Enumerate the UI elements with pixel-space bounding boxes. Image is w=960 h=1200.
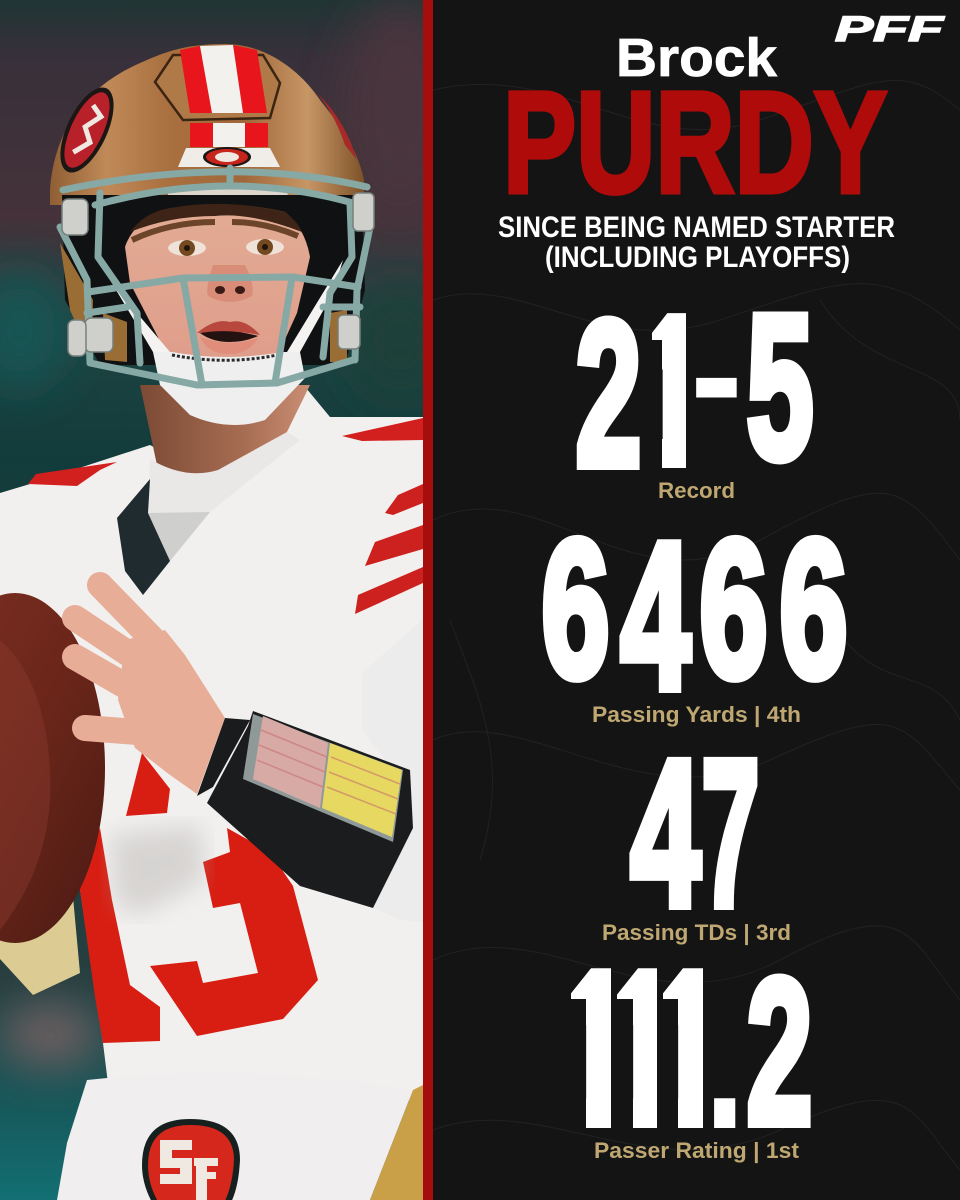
- jersey body: [0, 388, 423, 1100]
- stat: passing yards: 6: [700, 500, 768, 718]
- brow pad: [168, 190, 288, 195]
- pants: [57, 1073, 413, 1200]
- stat: passer rating: Passer Rating | 1st: [594, 1138, 800, 1163]
- flag patch: [243, 714, 403, 842]
- subtitle: [498, 211, 895, 274]
- stat: record: 2: [576, 278, 642, 509]
- stat: passing touchdowns: 4: [630, 718, 700, 950]
- face: [125, 204, 310, 357]
- helmet front bumper: [178, 148, 280, 167]
- forearm sleeve: [362, 619, 423, 922]
- eyes: [168, 239, 284, 256]
- gold pants: [370, 1085, 423, 1200]
- contour lines: [433, 80, 960, 1170]
- panel: player photo: [0, 0, 460, 1200]
- neck: [140, 385, 310, 480]
- sleeve stripes: [355, 484, 423, 614]
- stat: passing touchdowns: 7: [702, 718, 760, 950]
- subtitle: SINCE BEING NAMED STARTER: [498, 211, 895, 244]
- jersey shadow: [110, 825, 205, 915]
- stat: passing yards: 4: [620, 500, 690, 733]
- stat: passing touchdowns: Passing TDs | 3rd: [602, 920, 791, 945]
- helmet stripes: [180, 45, 268, 147]
- collar undershirt: [148, 432, 300, 513]
- stat: record: [576, 272, 814, 518]
- stat: passing touchdowns: [602, 718, 791, 950]
- helmet front logo: [203, 147, 251, 167]
- helmet vent: [155, 55, 280, 120]
- stat: record: 1: [643, 277, 703, 518]
- nose: [207, 265, 253, 302]
- cheek straps: [100, 260, 343, 352]
- arm sleeve: [207, 711, 413, 908]
- stat: passer rating: 1: [565, 932, 629, 1180]
- stat: passing yards: [542, 500, 848, 733]
- logo: PFF: PFF: [835, 10, 946, 49]
- lower left arm: [0, 901, 80, 995]
- stat: passer rating: .: [709, 986, 740, 1158]
- helmet side logo: [60, 88, 114, 172]
- stat: passing yards: 6: [542, 500, 610, 718]
- stat: passer rating: 1: [657, 932, 721, 1180]
- stat: passer rating: 2: [746, 936, 812, 1167]
- team logo on pants: [142, 1119, 240, 1200]
- hand: [75, 585, 225, 794]
- shoulder patches: [28, 462, 117, 486]
- red divider: [423, 0, 433, 1200]
- stat: passer rating: [565, 932, 812, 1180]
- eyebrows: [132, 222, 298, 240]
- helmet right logo: [317, 93, 357, 160]
- stat: record: -: [692, 297, 741, 454]
- title: Brock: Brock: [616, 28, 778, 88]
- chin strap: [172, 354, 282, 360]
- chin cup: [153, 352, 305, 425]
- football: [0, 593, 105, 943]
- hair shadow: [130, 204, 302, 232]
- stat: record: Record: [658, 478, 735, 503]
- stat: record: 5: [746, 272, 814, 502]
- stat: passing yards: Passing Yards | 4th: [592, 702, 801, 727]
- helmet opening: [62, 195, 365, 365]
- subtitle: (INCLUDING PLAYOFFS): [545, 241, 850, 274]
- jersey numbers: [78, 753, 318, 1043]
- lower side gold pads: [60, 243, 347, 362]
- helmet shell: [50, 44, 364, 205]
- mouth: [197, 321, 260, 354]
- right panel background: [433, 0, 960, 1200]
- facemask: [60, 168, 370, 385]
- ball highlights: [0, 640, 50, 930]
- helmet hardware: [62, 193, 374, 356]
- stat: passing yards: 6: [780, 500, 848, 718]
- wristband: [197, 718, 250, 796]
- stat: passer rating: 1: [612, 932, 676, 1180]
- dark neck vent: [117, 479, 170, 595]
